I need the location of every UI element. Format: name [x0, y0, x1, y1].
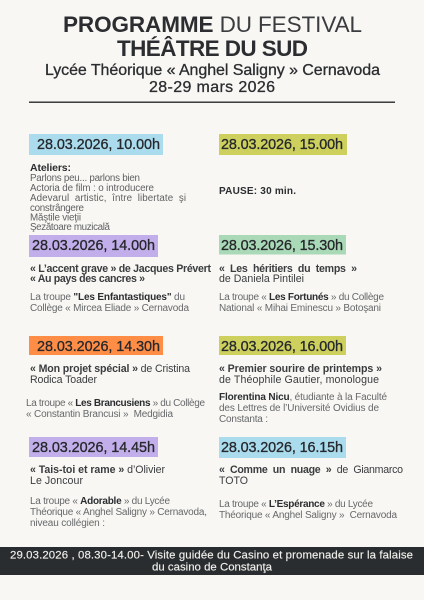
time badge: 28.03.2026, 14.45h — [32, 440, 155, 456]
performer: Constanta : — [219, 414, 268, 425]
workshop list: Parlons peu... parlons bien — [30, 173, 140, 184]
title: PROGRAMME DU FESTIVAL — [63, 12, 362, 37]
play title: « Premier sourire de printemps » — [219, 363, 382, 375]
footer banner — [0, 547, 424, 575]
time badge: 28.03.2026, 16.00h — [221, 339, 343, 355]
play title: « L’accent grave » de Jacques Prévert — [30, 263, 211, 275]
time badge: 28.03.2026, 15.00h — [221, 137, 343, 153]
workshop list: Adevarul artistic, între libertate şi — [30, 193, 186, 204]
panel: 15.00h pause — [219, 134, 347, 197]
title: THÉÂTRE DU SUD — [117, 36, 308, 61]
play title — [219, 363, 382, 386]
panel: 16.15h — [219, 437, 403, 521]
time badge: 28.03.2026, 14.00h — [32, 238, 155, 254]
workshop list: Actoria de film : o introducere — [30, 183, 155, 194]
panel: 14.00h — [29, 235, 211, 314]
play title: « Mon projet spécial » de Cristina — [30, 363, 190, 375]
panel: 10.00h workshops — [29, 134, 186, 233]
time badge — [29, 235, 158, 257]
play title: Le Joncour — [30, 475, 83, 487]
troupe: Théorique « Anghel Saligny » Cernavoda — [219, 510, 397, 521]
footer text: 29.03.2026 , 08.30-14.00- Visite guidée du Casino et promenade sur la falaise — [10, 550, 413, 562]
footer text: du casino de Constanţa — [152, 562, 273, 574]
play title — [219, 263, 357, 285]
play title — [30, 363, 190, 386]
performer — [219, 392, 387, 425]
subtitle — [45, 62, 380, 96]
troupe: La troupe « Adorable » du Lycée — [30, 496, 170, 507]
troupe — [26, 398, 205, 420]
workshop list: Ateliers: — [30, 162, 71, 174]
header — [29, 12, 395, 103]
play title — [30, 263, 211, 285]
troupe — [30, 496, 207, 529]
troupe — [219, 499, 397, 521]
panel: 14.45h — [29, 437, 207, 529]
time badge: 28.03.2026, 16.15h — [221, 440, 343, 456]
play title: « Les héritiers du temps » — [219, 263, 357, 275]
time badge: 28.03.2026, 15.30h — [221, 238, 343, 254]
play title: TOTO — [219, 475, 248, 487]
play title — [219, 464, 403, 487]
troupe: Théorique « Anghel Saligny » Cernavoda, — [30, 507, 207, 518]
performer: Florentina Nicu, étudiante à la Faculté — [219, 392, 387, 403]
play title: « Au pays des cancres » — [30, 273, 145, 285]
troupe: niveau collégien : — [30, 518, 105, 529]
workshop list: Măştile vieţii — [30, 212, 81, 224]
troupe: La troupe "Les Enfantastiques" du — [30, 292, 185, 303]
play title: de Daniela Pintilei — [219, 273, 304, 285]
troupe: La troupe « Les Fortunés » du Collège — [219, 292, 384, 303]
troupe: La troupe « Les Brancusiens » du Collège — [26, 398, 205, 409]
troupe: National « Mihai Eminescu » Botoşani — [219, 303, 381, 314]
subtitle: 28-29 mars 2026 — [149, 79, 275, 96]
troupe: « Constantin Brancusi » Medgidia — [26, 409, 173, 420]
time badge — [29, 134, 163, 155]
play title — [30, 464, 165, 487]
play title: « Comme un nuage » de Gianmarco — [219, 464, 403, 476]
play title: « Tais-toi et rame » d’Olivier — [30, 464, 165, 476]
panel: 15.30h — [219, 235, 384, 314]
panel: 16.00h — [219, 336, 387, 425]
workshop list: constrângere — [30, 203, 85, 214]
play title: de Théophile Gautier, monologue — [219, 374, 379, 386]
workshop list — [30, 162, 186, 233]
subtitle: Lycée Théorique « Anghel Saligny » Cernavoda — [45, 62, 380, 79]
troupe — [219, 292, 384, 314]
footer text — [10, 550, 413, 574]
time badge: 28.03.2026, 14.30h — [37, 339, 160, 355]
troupe: La troupe « L’Espérance » du Lycée — [219, 499, 373, 510]
workshop list: Şezătoare muzicală — [30, 222, 111, 233]
time badge: 28.03.2026, 10.00h — [37, 137, 160, 153]
troupe: Collège « Mircea Eliade » Cernavoda — [30, 303, 189, 314]
performer: des Lettres de l’Université Ovidius de — [219, 403, 379, 414]
troupe — [30, 292, 189, 314]
play title: Rodica Toader — [30, 374, 97, 386]
title — [63, 12, 362, 61]
pause text: PAUSE: 30 min. — [219, 186, 296, 197]
panel: 14.30h — [26, 336, 205, 420]
